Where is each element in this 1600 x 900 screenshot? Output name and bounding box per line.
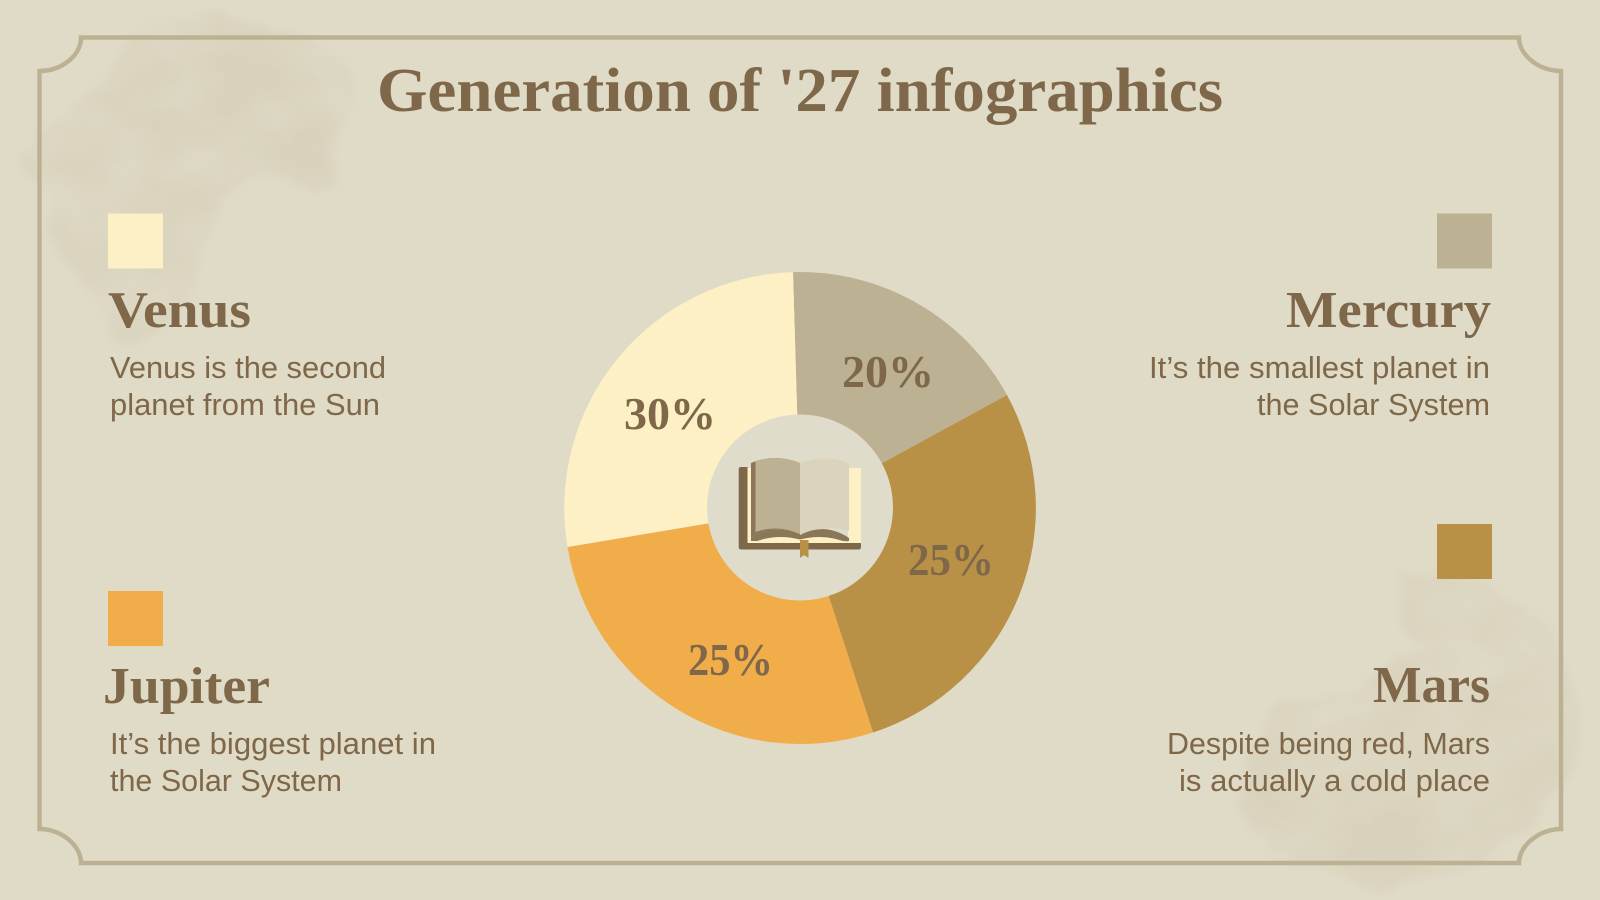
heading: Mercury: Mercury <box>1286 282 1491 339</box>
slice: Venus 30% <box>564 272 800 547</box>
text: Venus description: planet from the Sun <box>110 387 380 422</box>
donut chart <box>564 272 1036 744</box>
panel: Mars <box>1167 524 1492 798</box>
text: Mercury description <box>1149 350 1490 422</box>
watercolor stain: top left <box>15 13 355 345</box>
text: Venus description: Venus is the second <box>110 350 386 385</box>
heading: Venus: Venus <box>108 282 251 339</box>
slice: Mars 25% <box>800 395 1036 732</box>
icon: Mercury swatch <box>1437 214 1492 268</box>
text: Mars description: is actually a cold place <box>1179 763 1490 798</box>
icon: open book <box>739 458 861 558</box>
heading: Mars: Mars <box>1373 657 1490 714</box>
label: 20%: 20% <box>842 346 934 397</box>
icon: Jupiter swatch <box>108 591 163 646</box>
slice: Jupiter 25% <box>568 508 873 744</box>
slice: Mercury 20% <box>793 272 1007 508</box>
text: Jupiter description <box>110 726 436 798</box>
text: Venus description <box>110 350 386 422</box>
panel: Mercury <box>1149 214 1492 422</box>
text: Mars description: Despite being red, Mars <box>1167 726 1490 761</box>
panel: Venus <box>108 214 386 422</box>
label: 30%: 30% <box>624 388 716 439</box>
text: Jupiter description: It’s the biggest planet in <box>110 726 436 761</box>
text: Mercury description: the Solar System <box>1257 387 1490 422</box>
watercolor stain: bottom right <box>1243 574 1581 895</box>
title: Generation of '27 infographics <box>377 57 1223 125</box>
panel: Jupiter <box>103 591 436 798</box>
heading: Jupiter: Jupiter <box>103 658 270 715</box>
icon: Venus swatch <box>108 214 163 268</box>
text: Mars description <box>1167 726 1490 798</box>
label: 25% right: 25% <box>908 534 994 585</box>
text: Mercury description: It’s the smallest planet in <box>1149 350 1490 385</box>
text: Jupiter description: the Solar System <box>110 763 342 798</box>
label: 25% bottom: 25% <box>688 634 773 685</box>
icon: Mars swatch <box>1437 524 1492 579</box>
center hole <box>707 414 893 600</box>
